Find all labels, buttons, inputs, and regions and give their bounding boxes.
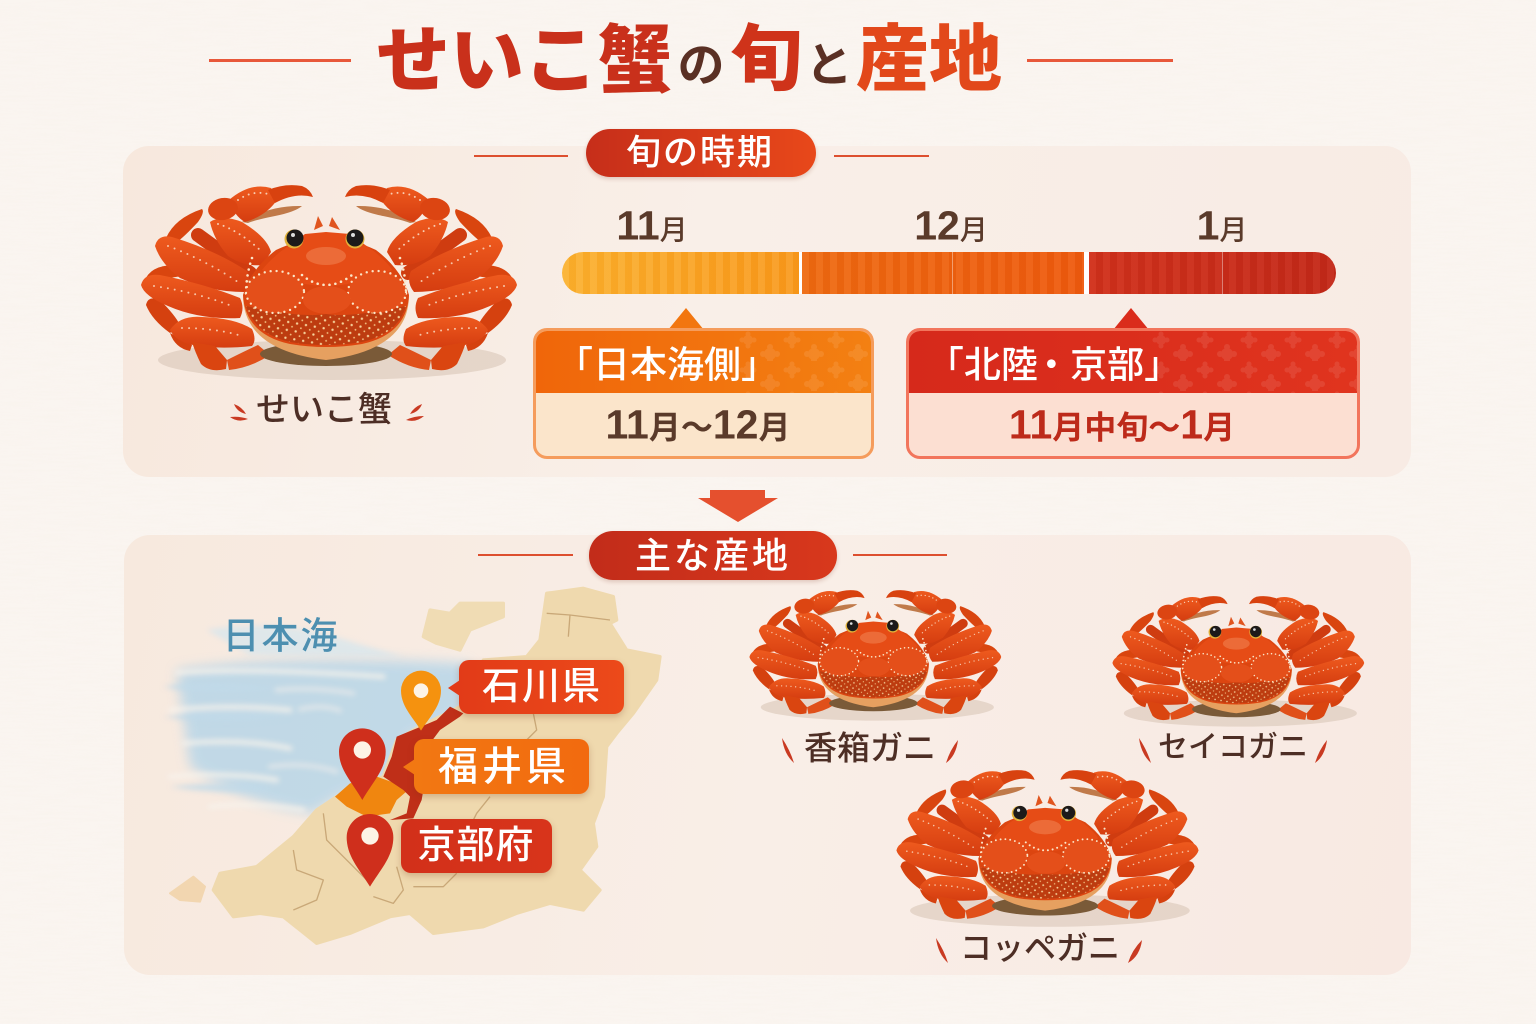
- panel: producing areas: [124, 535, 1411, 975]
- Noto island: [423, 603, 503, 650]
- heading: season: [474, 129, 929, 181]
- crab label: 香箱ガニ: 香箱ガニ: [804, 730, 936, 766]
- month labels: 11月: [616, 202, 688, 248]
- heading: producing areas: [478, 531, 947, 584]
- sea label: 日本海: [222, 616, 340, 656]
- callout: 日本海側: 11月～12月: [606, 402, 790, 448]
- callout: 日本海側: [533, 308, 874, 459]
- small island: [170, 877, 205, 902]
- title: の: [678, 38, 724, 92]
- month labels: [616, 202, 1247, 248]
- callout: 北陸・京部: 「北陸・ 京部」: [927, 344, 1181, 386]
- callout: 北陸・京部: 11月中旬～1月: [1009, 402, 1235, 448]
- pin: Ishikawa: [401, 671, 441, 731]
- crab label: セイコガニ: セイコガニ: [1158, 731, 1308, 764]
- label: 石川県: 石川県: [482, 666, 602, 708]
- label: 京都府: 京部府: [417, 825, 535, 867]
- label: 福井県: [414, 739, 589, 794]
- month labels: 12月: [914, 202, 988, 248]
- label: 福井県: 福井県: [438, 745, 570, 789]
- callout: 日本海側: 「日本海側」: [556, 344, 778, 386]
- land: [213, 588, 660, 943]
- pin: Kyoto: [347, 814, 393, 887]
- icon: crab セイコガニ: [1112, 596, 1364, 726]
- label: 石川県: [459, 660, 624, 714]
- title: せいこ蟹: [376, 19, 672, 102]
- title: 産地: [856, 20, 1002, 100]
- crab label: せいこ蟹: せいこ蟹: [256, 391, 392, 429]
- title: [209, 19, 1173, 102]
- arrow: [698, 490, 778, 522]
- red region: [383, 707, 463, 820]
- timeline bar: [562, 252, 1336, 294]
- title: 旬: [730, 20, 802, 100]
- label: 京都府: [401, 819, 552, 873]
- sea: [163, 626, 470, 813]
- orange region: [335, 777, 410, 817]
- panel: season: [123, 146, 1411, 477]
- heading: season: 旬の時期: [626, 134, 774, 172]
- pin: Fukui: [339, 728, 386, 800]
- callout: 北陸・京部: [906, 308, 1360, 459]
- icon: crab コッペガニ: [896, 770, 1198, 927]
- month labels: 1月: [1197, 202, 1247, 248]
- icon: main crab: [141, 185, 517, 380]
- crab label: コッペガニ: コッペガニ: [960, 930, 1120, 966]
- icon: crab 香箱ガニ: [750, 590, 1002, 720]
- heading: producing areas: 主な産地: [635, 535, 791, 576]
- title: と: [806, 38, 852, 92]
- map: [166, 586, 662, 945]
